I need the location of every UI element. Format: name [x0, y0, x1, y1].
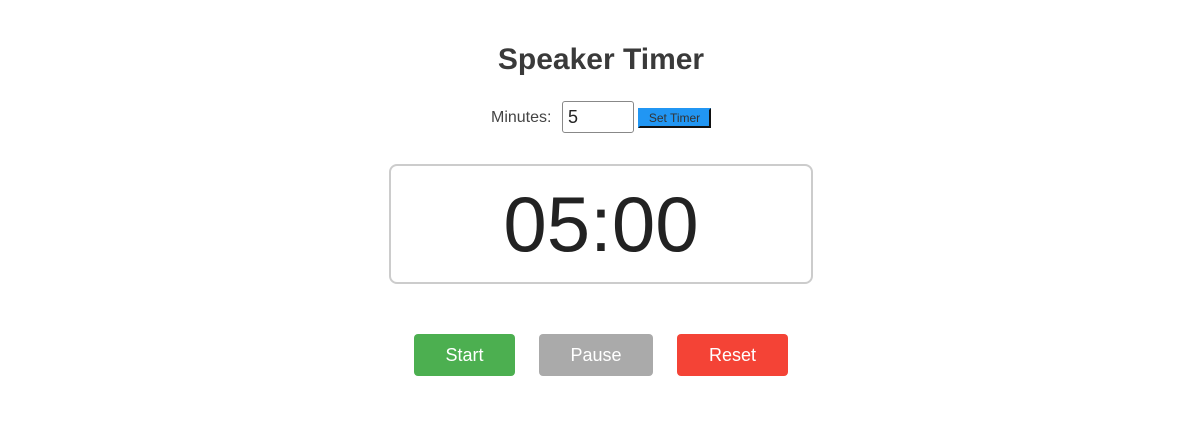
timer display: [389, 164, 813, 284]
reset button: Reset: [709, 345, 756, 365]
title: Speaker Timer: [498, 43, 704, 76]
set timer button: [638, 108, 711, 128]
pause button: Pause: [570, 345, 622, 365]
timer display: 05:00: [503, 180, 699, 268]
start button: [414, 334, 515, 376]
minutes input: [562, 101, 634, 133]
minutes control: [491, 101, 711, 133]
minutes input: 5: [568, 107, 578, 127]
minutes label: Minutes:: [491, 109, 551, 126]
set timer button: Set Timer: [649, 111, 700, 125]
start button: Start: [445, 345, 484, 365]
reset button: [677, 334, 788, 376]
pause button: [539, 334, 653, 376]
